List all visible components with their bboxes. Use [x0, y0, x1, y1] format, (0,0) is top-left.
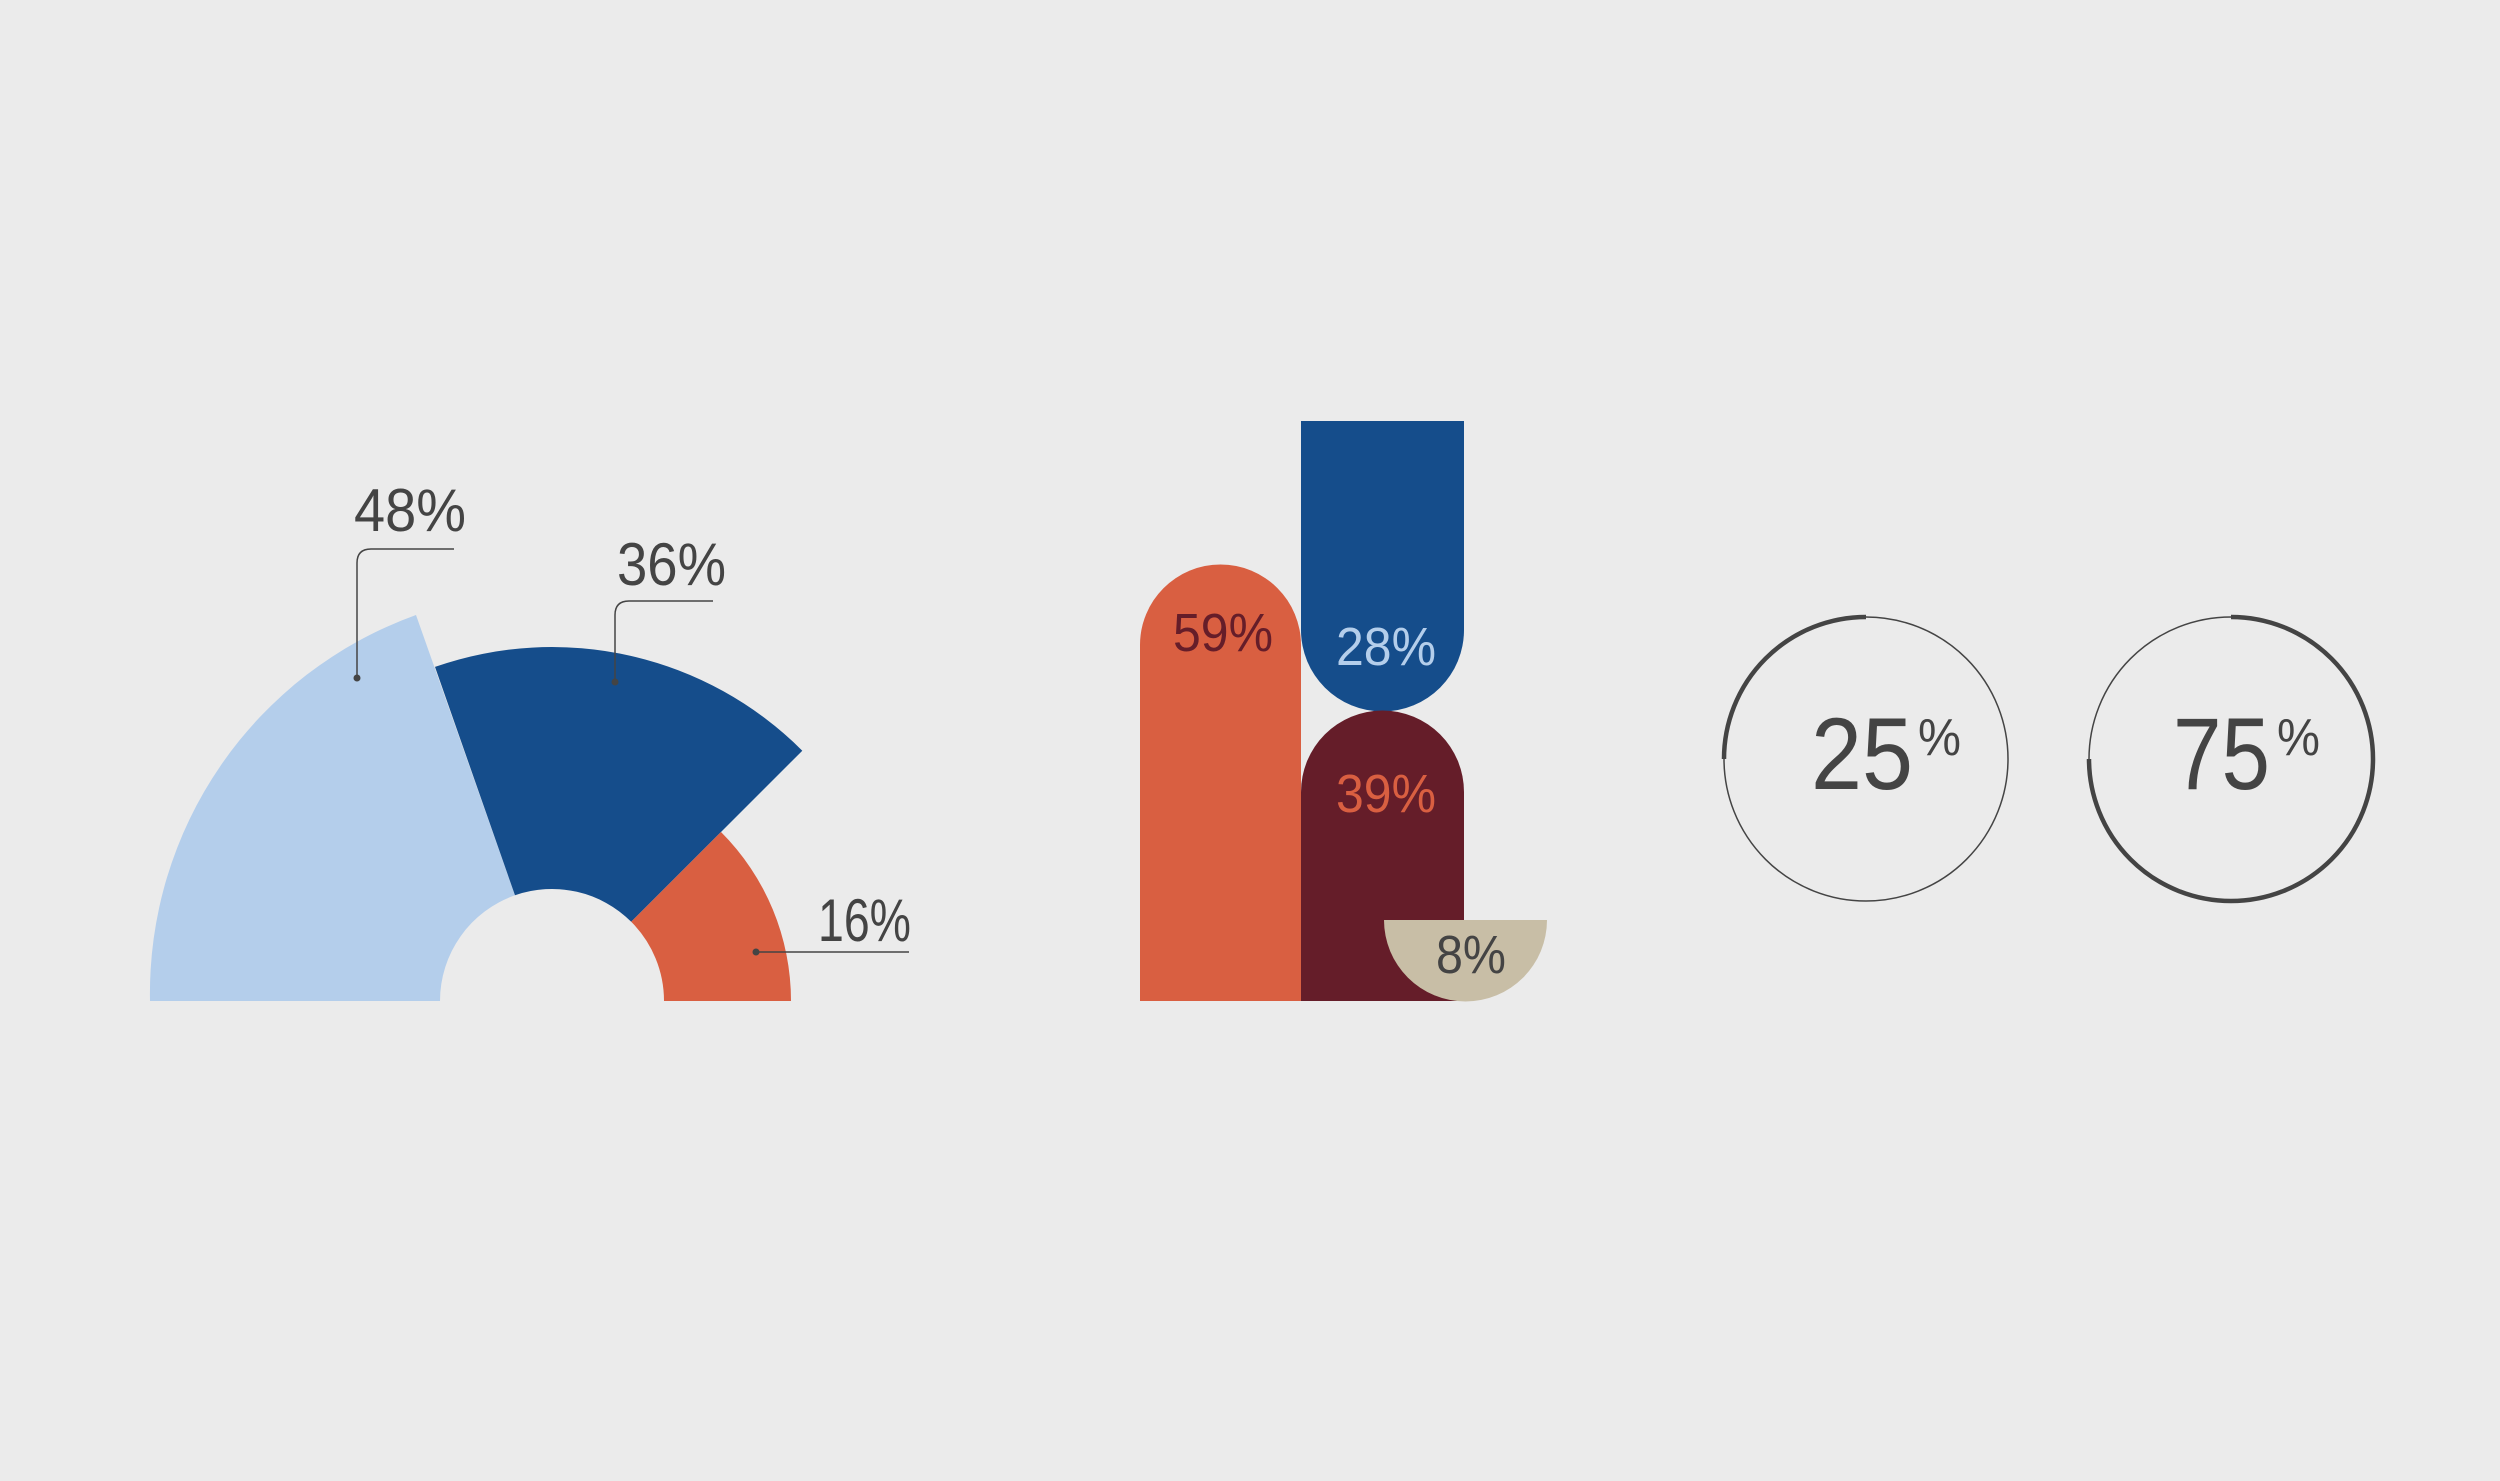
bar: 59% orange: [1140, 564, 1301, 1001]
ring: 75%: 75: [2173, 697, 2270, 811]
bar: 39% maroon: [1301, 710, 1464, 1001]
callout: 16%: 16%: [818, 887, 911, 954]
label: 39%: 39%: [1336, 764, 1436, 824]
ring: 75%: %: [2277, 709, 2320, 767]
segment: 48% light blue: [150, 615, 515, 1001]
callout: 36%: 36%: [617, 531, 726, 598]
callout: 48%: [354, 477, 466, 682]
ring: 75%: [2089, 617, 2373, 901]
bar: 28% blue: [1301, 421, 1464, 711]
callout: 36%: [612, 531, 726, 686]
bar: 8% beige: [1384, 920, 1547, 1002]
rounded bar chart: [1140, 421, 1547, 1002]
semi-donut chart: [150, 477, 911, 1001]
callout: 48%: 48%: [354, 477, 466, 544]
callout: 16%: [752, 887, 911, 956]
ring: 25%: 25: [1811, 697, 1913, 811]
label: 59%: 59%: [1173, 603, 1273, 663]
ring: 25%: [1724, 617, 2008, 901]
label: 8%: 8%: [1436, 925, 1506, 985]
segment: 36% dark blue: [435, 647, 802, 922]
label: 28%: 28%: [1336, 617, 1436, 677]
segment: 16% orange: [631, 832, 791, 1001]
ring: 25%: %: [1918, 709, 1961, 767]
